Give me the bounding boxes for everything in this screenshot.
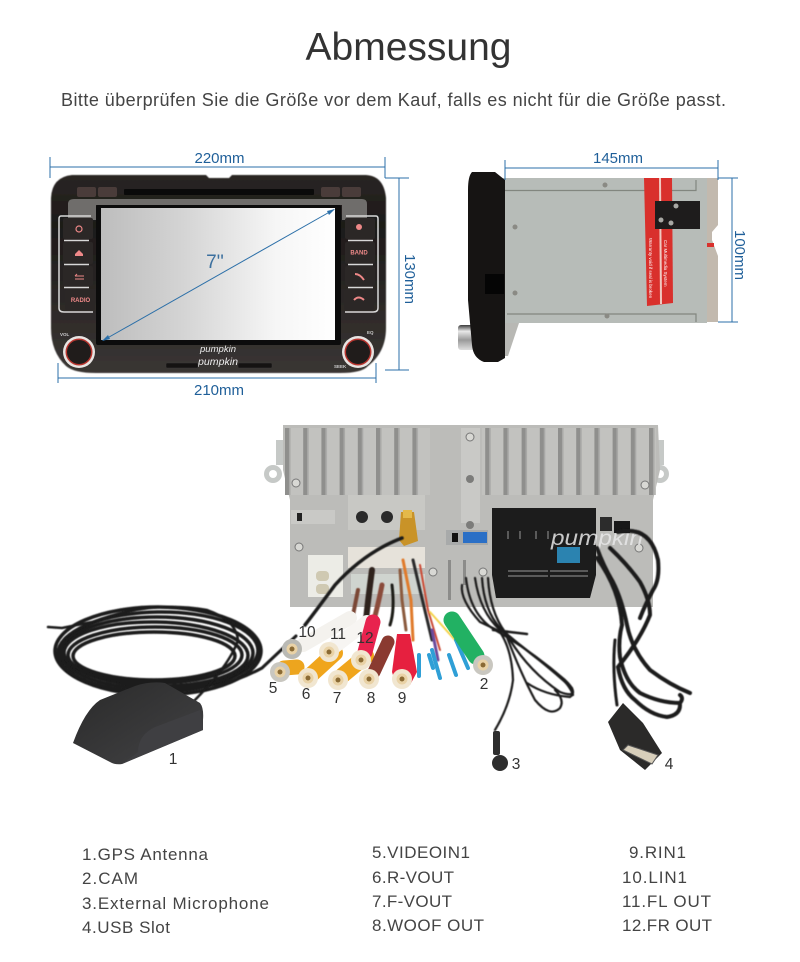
heat fins [285, 428, 430, 495]
bracket [655, 201, 700, 229]
legend column 2: 6.R-VOUT [372, 868, 454, 887]
main connector [492, 508, 596, 598]
legend column 3: 9.RIN1 [629, 843, 686, 862]
part number labels: 6 [302, 686, 310, 703]
USB cable bundle [597, 531, 690, 717]
legend column 3: 10.LIN1 [622, 868, 687, 887]
dimension 130mm [385, 178, 418, 370]
unit body [51, 175, 386, 373]
silver trim band [68, 199, 367, 220]
legend column 2: 8.WOOF OUT [372, 916, 484, 935]
blue wire ends [419, 640, 468, 678]
dimension 220mm [50, 150, 385, 178]
legend column 1 [82, 845, 269, 937]
white connectors [348, 547, 425, 568]
lower panel [348, 495, 425, 530]
screen bezel [96, 205, 341, 345]
part number labels: 12 [356, 630, 374, 647]
black front panel [468, 172, 505, 362]
plug 10 [282, 618, 350, 659]
left knob [63, 336, 95, 368]
dimension 220mm: 220mm [194, 150, 245, 167]
right side buttons [344, 216, 378, 312]
bottom slot [166, 363, 198, 368]
sticker text [648, 238, 668, 299]
lower fins [448, 560, 466, 600]
volume knob [458, 325, 478, 350]
dip block [463, 532, 487, 543]
legend column 1: 3.External Microphone [82, 894, 269, 913]
legend column 1: 2.CAM [82, 869, 138, 888]
part number labels: 4 [665, 756, 674, 773]
lower wedge [502, 323, 519, 356]
screen size label: 7'' [206, 252, 224, 273]
socket openings [316, 571, 329, 594]
dimension 210mm [58, 363, 376, 399]
casing [283, 425, 660, 607]
legend column 3: 11.FL OUT [622, 892, 711, 911]
rear view of unit [264, 425, 669, 678]
GPS antenna puck [73, 682, 203, 764]
legend column 3 [622, 843, 712, 935]
mounting ears [264, 440, 669, 483]
plug 9 [392, 634, 417, 689]
part number labels: 1 [169, 751, 177, 768]
title: Abmessung [306, 26, 512, 69]
legend column 3: 12.FR OUT [622, 916, 712, 935]
GPS cable coil [48, 538, 402, 703]
post holes [466, 475, 474, 483]
legend column 2: 7.F-VOUT [372, 892, 452, 911]
small ports [600, 517, 612, 531]
top buttons and disc slot [77, 187, 361, 197]
screen size arrow [102, 209, 335, 341]
legend column 2: 5.VIDEOIN1 [372, 843, 470, 862]
legend column 2 [372, 843, 484, 935]
part number labels: 2 [480, 676, 488, 693]
RCA plugs [270, 618, 493, 690]
holes [356, 511, 368, 523]
plug 2 [452, 620, 493, 675]
knob labels: EQ [367, 330, 374, 335]
centre post [461, 428, 480, 523]
part number labels: 5 [269, 680, 277, 697]
plug 7 [328, 656, 366, 690]
connector pins [507, 531, 588, 577]
metal chassis [503, 178, 707, 323]
knob labels: SEEK [334, 364, 347, 369]
brand logo: pumpkin [197, 357, 238, 368]
dimension 100mm [718, 178, 748, 322]
legend column 1: 1.GPS Antenna [82, 845, 209, 864]
left side buttons: RADIO [71, 298, 90, 304]
dip socket [452, 533, 458, 542]
sticker stripe [659, 178, 662, 304]
knob labels [60, 330, 374, 369]
side view of unit [458, 172, 718, 362]
front view head unit [51, 175, 386, 373]
blue fuse [557, 547, 580, 563]
part number labels: 3 [512, 756, 520, 773]
plug 11 [319, 622, 367, 662]
chassis screws [512, 182, 610, 318]
dimension 145mm [505, 150, 718, 180]
plug 8 [359, 642, 388, 689]
panel clip [485, 274, 504, 294]
part number labels: 8 [367, 690, 375, 707]
USB plug [608, 703, 662, 770]
part number labels: 10 [298, 624, 316, 641]
dimension 130mm: 130mm [401, 254, 418, 304]
brand watermark: pumpkin [550, 527, 643, 550]
warranty sticker [644, 178, 673, 306]
plug 5 [270, 662, 297, 682]
chassis ribs [504, 180, 696, 322]
rear heatsink [706, 178, 718, 322]
part number labels: 11 [330, 626, 346, 643]
plug 12 [351, 622, 373, 670]
ear holes [269, 470, 277, 478]
heatsink red mark [707, 243, 714, 247]
dimension 100mm: 100mm [731, 230, 748, 280]
casing screws [292, 433, 649, 576]
left port [291, 510, 335, 524]
microphone cable [462, 578, 573, 730]
brand logo: pumpkin [199, 344, 236, 354]
bracket screws [658, 204, 678, 226]
dimension 210mm: 210mm [194, 382, 244, 399]
part number labels [169, 624, 674, 773]
sticker text: Car Multimedia System [663, 240, 668, 287]
knob labels: VOL [60, 332, 70, 337]
left side buttons [59, 216, 95, 312]
white power socket [308, 555, 343, 597]
brand logo [197, 344, 238, 368]
dimension 145mm: 145mm [593, 150, 643, 167]
right knob [342, 336, 374, 368]
dip switch [446, 530, 488, 545]
sticker text: Warranty void if seal is broken [648, 238, 653, 299]
right side buttons: BAND [350, 250, 368, 256]
subtitle: Bitte überprüfen Sie die Größe vor dem Kauf, falls es nicht für die Größe passt. [61, 90, 726, 110]
plug 6 [298, 653, 335, 688]
gold antenna connector [399, 510, 418, 546]
part number labels: 9 [398, 690, 406, 707]
microphone head [492, 731, 508, 771]
part number labels: 7 [333, 690, 341, 707]
legend column 1: 4.USB Slot [82, 918, 170, 937]
wires [352, 560, 455, 660]
screen [101, 208, 335, 340]
